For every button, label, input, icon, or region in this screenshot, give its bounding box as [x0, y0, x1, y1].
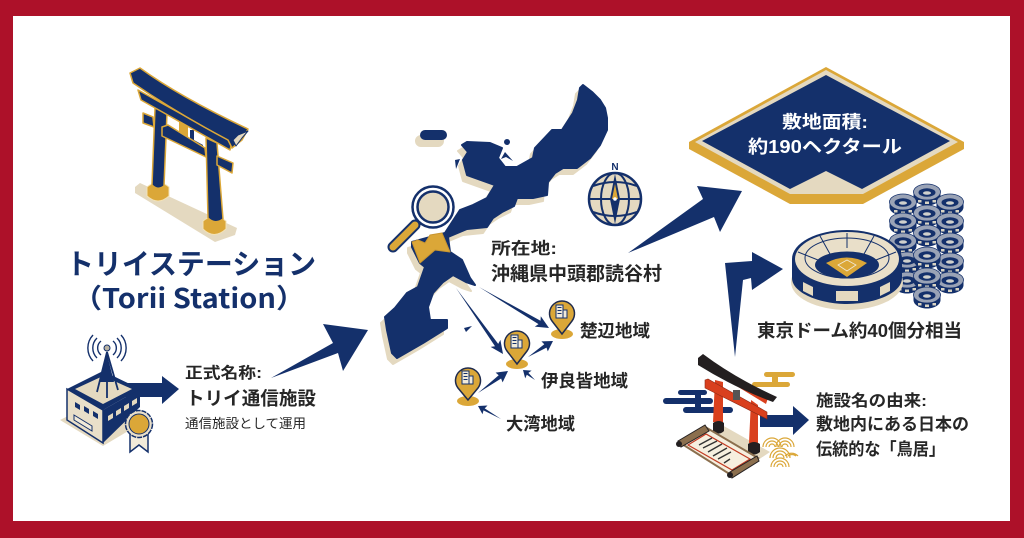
gold center post [179, 122, 188, 140]
icon: compass globe: N [611, 162, 619, 173]
icon: stack of small stadiums [890, 184, 964, 308]
panel: site area badge: 敷地面積: [782, 112, 868, 132]
map arrows [456, 287, 553, 419]
title: トリイステーション [66, 242, 316, 283]
panel: site area badge: 約190ヘクタール [748, 137, 902, 157]
icon: arrow to origin text [760, 406, 809, 435]
icon: arrow to map [271, 324, 368, 378]
left base [147, 182, 169, 201]
text: official name: 通信施設として運用 [185, 416, 306, 431]
text: official name: トリイ通信施設 [186, 388, 316, 409]
icon: large torii gate [130, 68, 248, 242]
islets [420, 130, 513, 332]
title: （Torii Station） [73, 277, 305, 316]
second lintel [138, 90, 232, 150]
label: Irabaru: 伊良皆地域 [541, 371, 628, 391]
text: origin of the name [816, 392, 969, 459]
text: location: 沖縄県中頭郡読谷村 [491, 263, 662, 285]
pin: Irabaru [504, 331, 530, 369]
map: Okinawa island [381, 85, 607, 364]
icon: arrow from building [125, 376, 179, 404]
text: Tokyo Dome comparison: 東京ドーム約40個分相当 [757, 321, 962, 341]
icon: arrow up and right [725, 252, 783, 357]
text: official name: 正式名称: [185, 364, 262, 382]
text: official name [185, 364, 316, 431]
panel: site area badge [689, 67, 964, 204]
icon: compass globe [589, 162, 641, 225]
scroll [682, 428, 758, 475]
text: origin of the name: 伝統的な「鳥居」 [816, 440, 945, 459]
label: Sobe: 楚辺地域 [580, 321, 650, 341]
tie beam [162, 125, 206, 157]
right base [203, 216, 226, 234]
icon: arrow to area [628, 186, 742, 253]
highlighted Yomitan area [412, 233, 450, 263]
top beam [130, 68, 248, 148]
pin: Owan [456, 368, 480, 406]
text: origin of the name: 施設名の由来: [816, 392, 927, 410]
icon: seigaiha wave pattern [763, 438, 798, 467]
pillars [152, 108, 167, 188]
icon: Tokyo Dome stadium [791, 230, 903, 310]
title [66, 242, 316, 316]
icon: communications building [60, 335, 152, 452]
icon: magnifying glass [393, 186, 454, 247]
icon: red torii with scroll [676, 354, 777, 478]
text: location [491, 239, 662, 285]
label: Owan: 大湾地域 [506, 414, 575, 434]
icon: clouds [663, 372, 795, 413]
text: origin of the name: 敷地内にある日本の [816, 414, 969, 434]
text: location: 所在地: [491, 239, 557, 258]
pin: Sobe [550, 301, 574, 339]
tie beam stubs [143, 113, 154, 127]
